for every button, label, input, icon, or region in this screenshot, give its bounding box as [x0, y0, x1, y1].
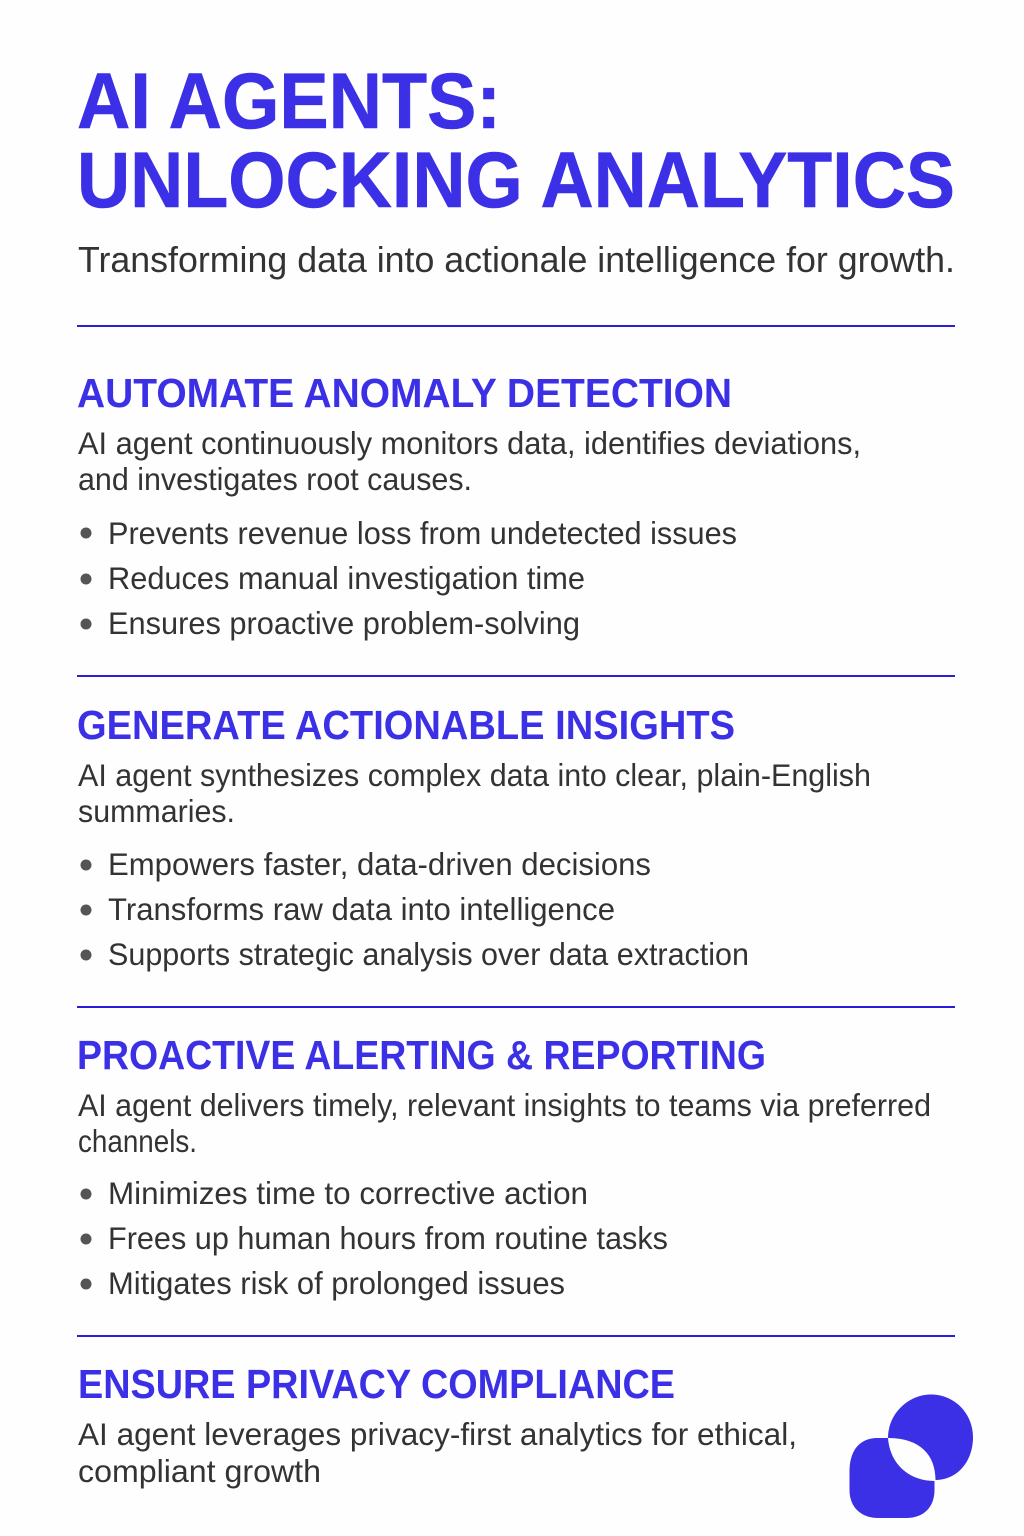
bullet list: Empowers faster, data-driven decisions [108, 846, 651, 882]
description: AI agent delivers timely, relevant insights to teams via preferred [78, 1087, 931, 1123]
title [77, 56, 955, 224]
heading: AUTOMATE ANOMALY DETECTION [77, 370, 732, 416]
heading: GENERATE ACTIONABLE INSIGHTS [77, 702, 735, 748]
description [78, 757, 871, 829]
panel: generate actionable insights [77, 702, 871, 972]
description: summaries. [78, 793, 235, 829]
description: AI agent leverages privacy-first analytics for ethical, [78, 1416, 797, 1452]
bullet list [80, 1175, 668, 1301]
subtitle: Transforming data into actionale intelligence for growth. [78, 239, 955, 280]
description: AI agent continuously monitors data, identifies deviations, [78, 425, 861, 461]
heading: ENSURE PRIVACY COMPLIANCE [78, 1361, 675, 1407]
bullet list: Transforms raw data into intelligence [108, 891, 615, 927]
description: compliant growth [78, 1453, 321, 1489]
title: UNLOCKING ANALYTICS [77, 135, 955, 224]
bullet list: Reduces manual investigation time [108, 560, 585, 596]
bullet list: Prevents revenue loss from undetected issues [108, 515, 737, 551]
panel: ensure privacy compliance [78, 1361, 797, 1489]
description [78, 1416, 797, 1489]
bullet list: Mitigates risk of prolonged issues [108, 1265, 565, 1301]
description: and investigates root causes. [78, 461, 472, 497]
bullet list [80, 515, 737, 641]
description: channels. [78, 1123, 197, 1159]
heading: PROACTIVE ALERTING & REPORTING [77, 1032, 766, 1078]
description [78, 425, 861, 497]
bullet list: Frees up human hours from routine tasks [108, 1220, 668, 1256]
icon: overlapping logo mark [850, 1394, 973, 1518]
title: AI AGENTS: [77, 56, 501, 145]
bullet list: Ensures proactive problem-solving [108, 605, 580, 641]
panel: automate anomaly detection [77, 370, 861, 641]
description: AI agent synthesizes complex data into clear, plain-English [78, 757, 871, 793]
description [78, 1087, 931, 1159]
bullet list: Minimizes time to corrective action [108, 1175, 588, 1211]
bullet list: Supports strategic analysis over data extraction [108, 936, 749, 972]
bullet list [80, 846, 749, 972]
panel: proactive alerting and reporting [77, 1032, 931, 1301]
